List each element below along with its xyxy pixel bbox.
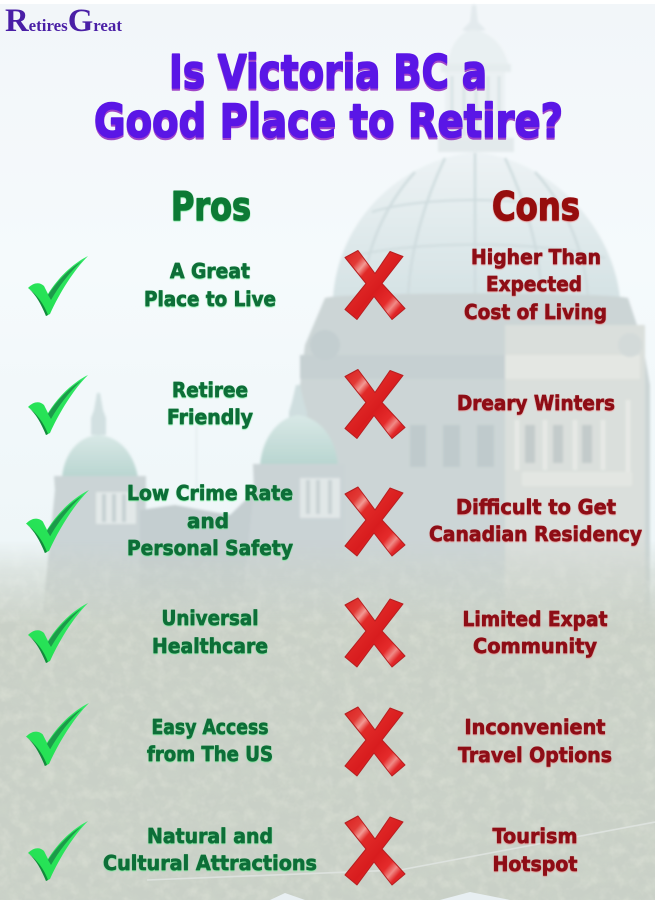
con: limited expat community: Limited Expat [462,607,608,631]
main building body [300,294,650,620]
main dome lantern [438,5,514,152]
trees [0,530,655,900]
pro: a great place to live: Place to Live [144,287,276,311]
pro: low crime rate: and [187,509,229,533]
pro: universal healthcare: Healthcare [152,634,268,658]
con: higher than expected cost of living: Higher Than [471,245,601,269]
icons: check marks [26,256,89,881]
pro: a great place to live: A Great [170,259,250,283]
pro: retiree friendly [167,378,253,429]
heading: Cons: Cons [492,185,580,230]
title: Is Victoria BC a [169,45,487,99]
con: tourism hotspot: Tourism [492,824,578,848]
heading: Pros: Pros [171,185,251,230]
con: higher than expected cost of living: Expected [486,272,582,296]
centre wing [140,490,256,620]
pro: easy access from the US [147,715,273,766]
pro: retiree friendly: Friendly [167,405,253,429]
con: difficult to get canadian residency: Canadian Residency [429,522,642,546]
con: difficult to get canadian residency [429,495,642,546]
thin pole [196,425,197,495]
pro: easy access from the US: Easy Access [152,715,268,739]
pro: a great place to live [144,259,276,311]
con: tourism hotspot: Hotspot [492,852,578,876]
pro: low crime rate: Low Crime Rate [127,481,293,505]
title: Good Place to Retire? [94,94,563,148]
pro: universal healthcare [152,606,268,658]
con: inconvenient travel options: Inconvenient [464,715,606,739]
con: tourism hotspot [492,824,578,876]
left small dome [42,393,146,620]
logo: RetiresGreat: RetiresGreat [5,3,122,39]
right small dome [240,385,345,620]
pro: low crime rate: Personal Safety [127,536,293,560]
pro: low crime rate [127,481,293,560]
con: higher than expected cost of living: Cost of Living [464,300,607,324]
con: limited expat community [462,607,608,658]
cons list [429,245,642,876]
pro: easy access from the US: from The US [147,742,273,766]
pro: retiree friendly: Retiree [172,378,248,402]
con: inconvenient travel options [458,715,612,767]
con: inconvenient travel options: Travel Options [458,743,612,767]
pro: natural and cultural attractions: Cultural Attractions [103,851,317,875]
pros list [103,259,317,875]
pro: natural and cultural attractions: Natural and [147,824,273,848]
icons: red crosses [345,250,405,885]
con: limited expat community: Community [473,634,597,658]
pro: natural and cultural attractions [103,824,317,875]
pro: universal healthcare: Universal [162,606,258,630]
con: higher than expected cost of living [464,245,607,324]
main dome [333,152,620,298]
con: difficult to get canadian residency: Difficult to Get [456,495,616,519]
con: dreary winters: Dreary Winters [457,391,615,415]
title [94,45,563,148]
